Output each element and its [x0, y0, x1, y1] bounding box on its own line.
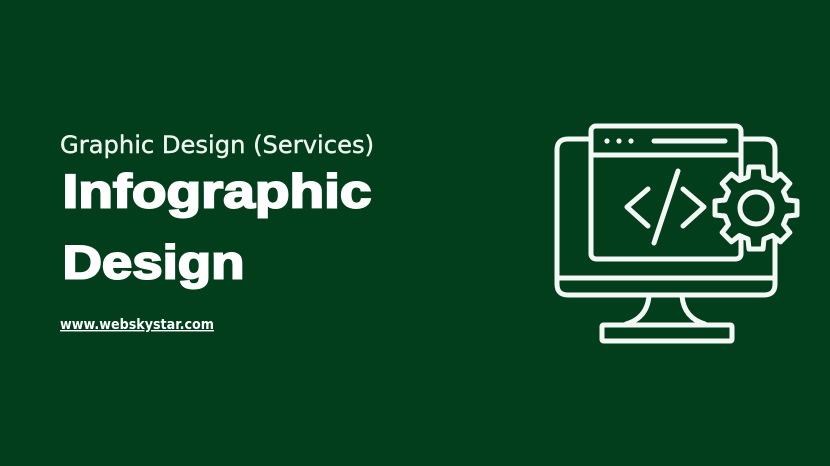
icon: monitor with code window and gear [557, 126, 797, 341]
code symbol [627, 171, 704, 243]
monitor body [557, 139, 775, 295]
screen baseline [557, 276, 775, 280]
website link: www.webskystar.com [60, 317, 214, 333]
window header line [591, 152, 741, 158]
subtitle: Graphic Design (Services) [60, 131, 374, 159]
monitor base [602, 325, 732, 341]
browser window [591, 126, 741, 259]
title line 2: Design [62, 236, 244, 288]
title line 1: Infographic [62, 164, 372, 218]
monitor stand [626, 296, 705, 324]
gear [715, 167, 797, 249]
window dots [604, 138, 634, 144]
window address bar [654, 138, 725, 144]
